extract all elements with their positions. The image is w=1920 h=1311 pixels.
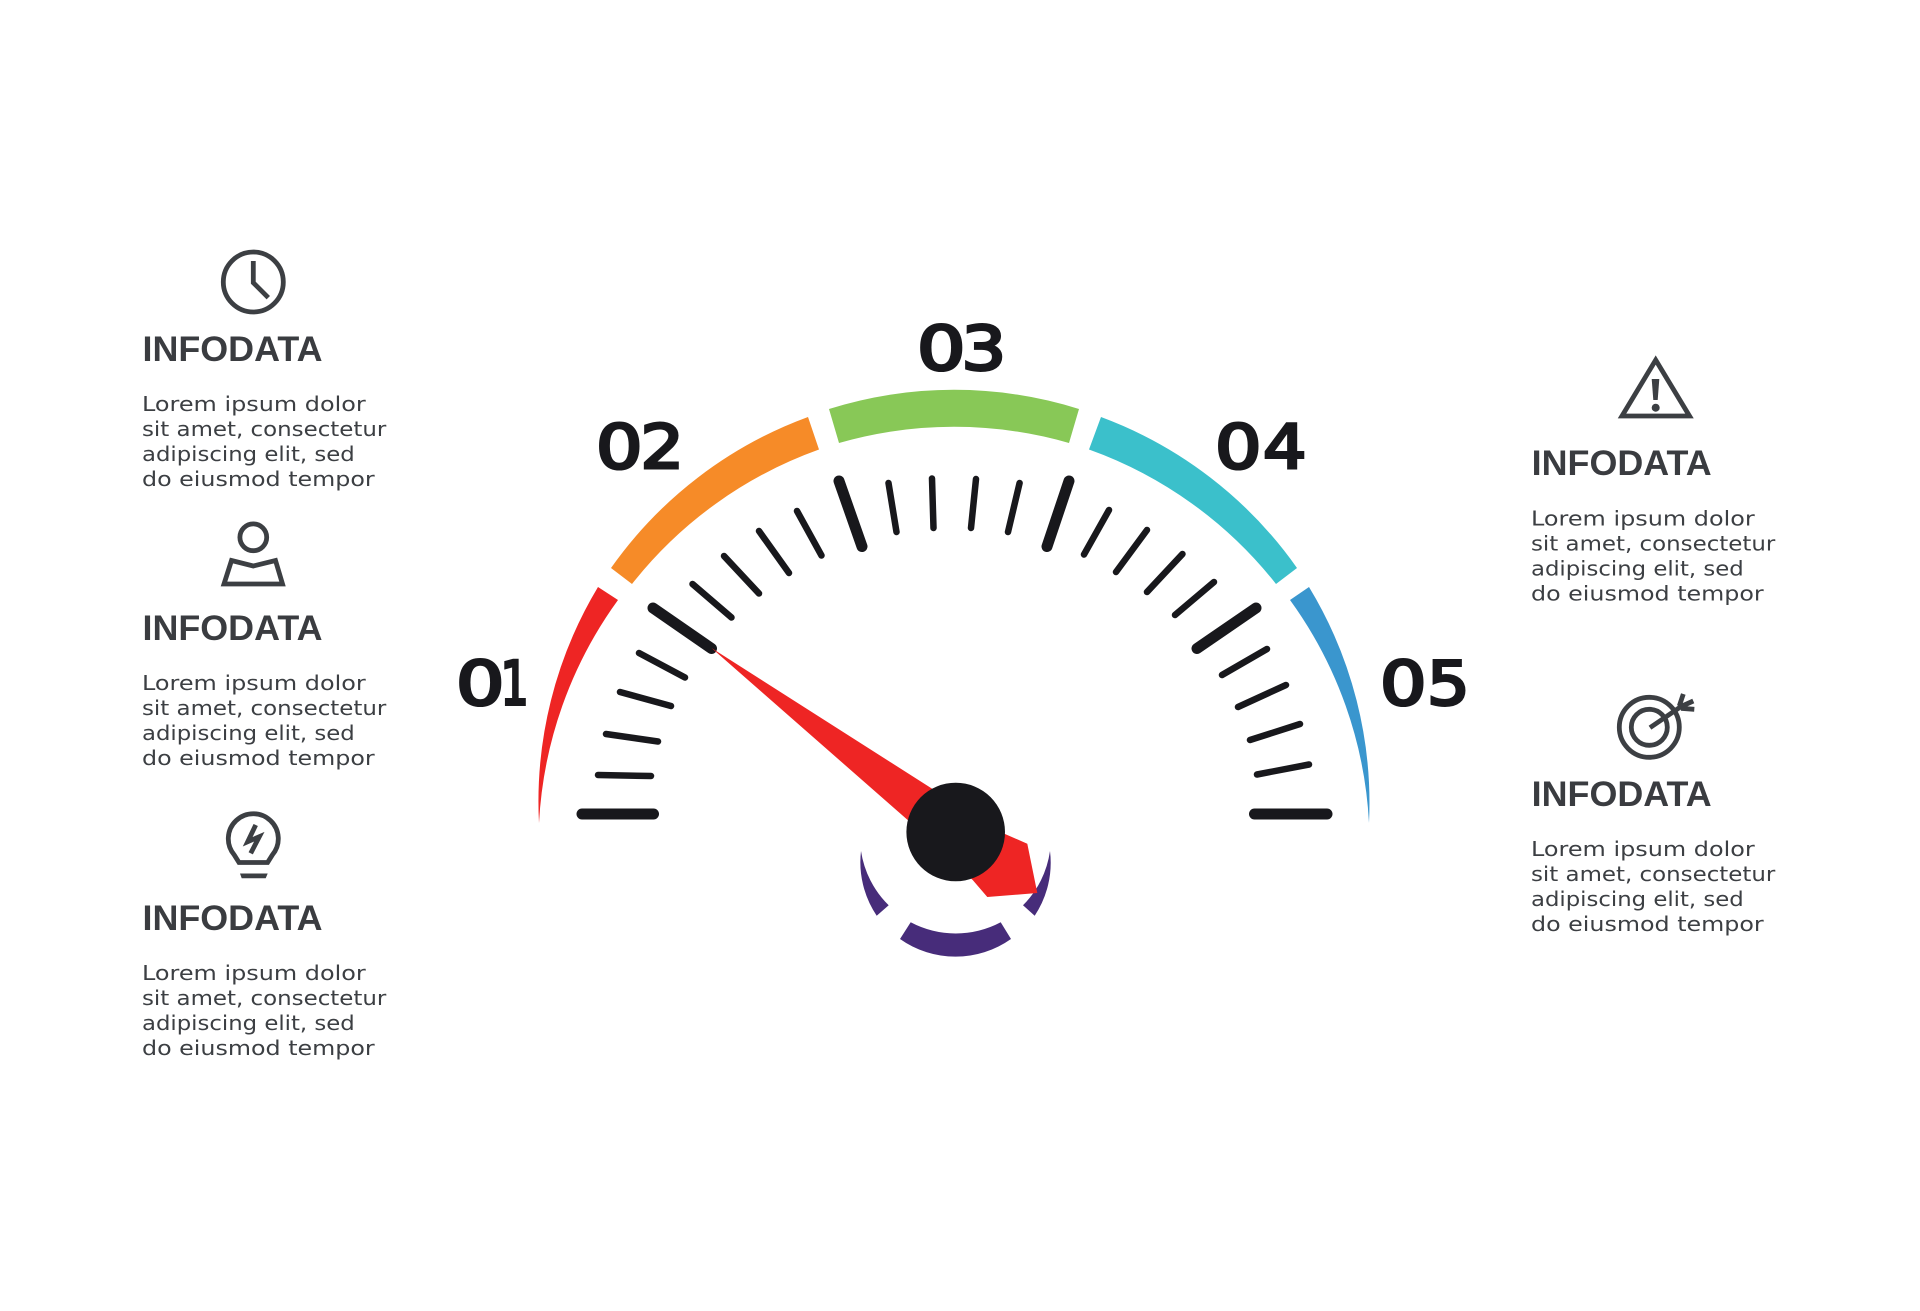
body text: Lorem ipsum dolor [142, 961, 367, 985]
arc segment 01 red [538, 587, 618, 823]
body text: sit amet, consectetur [142, 696, 387, 720]
gauge numbers [456, 313, 1470, 720]
icon: person reading [224, 524, 282, 584]
number 02 [596, 411, 684, 483]
body text [142, 392, 387, 491]
number 03: 0 [917, 314, 966, 385]
needle hub [906, 783, 1005, 881]
number 01 [456, 647, 529, 720]
body text: Lorem ipsum dolor [1531, 506, 1756, 530]
gauge needle [712, 648, 1037, 897]
number 05 [1380, 647, 1470, 720]
info block: clock [142, 252, 387, 491]
number 05: 5 [1427, 648, 1470, 720]
heading: INFODATA [142, 899, 322, 938]
body text: do eiusmod tempor [1531, 912, 1765, 936]
body text: adipiscing elit, sed [142, 1011, 355, 1035]
body text [142, 671, 387, 770]
body text: sit amet, consectetur [1531, 532, 1776, 556]
gauge arc segments [538, 390, 1369, 823]
body text: Lorem ipsum dolor [1531, 837, 1756, 861]
body text: do eiusmod tempor [142, 467, 376, 491]
arc segment 03 green [829, 390, 1079, 443]
number 03: 3 [962, 313, 1006, 384]
body text: adipiscing elit, sed [142, 721, 355, 745]
arc segment 04 teal [1089, 417, 1297, 584]
info block: light bulb [142, 814, 387, 1060]
heading: INFODATA [142, 609, 322, 648]
number 02: 0 [596, 411, 643, 482]
icon: warning triangle [1622, 360, 1690, 416]
arc segment 05 blue [1290, 587, 1369, 823]
body text [1531, 837, 1776, 936]
body text: Lorem ipsum dolor [142, 392, 367, 416]
number 01: 1 [500, 647, 529, 719]
info block: warning [1531, 360, 1776, 606]
body text: sit amet, consectetur [1531, 862, 1776, 886]
body text: do eiusmod tempor [142, 1036, 376, 1060]
body text: adipiscing elit, sed [1531, 887, 1744, 911]
needle pointer [712, 648, 1037, 897]
body text: adipiscing elit, sed [142, 442, 355, 466]
body text: sit amet, consectetur [142, 986, 387, 1010]
purple base arcs [860, 851, 1051, 957]
number 03 [917, 313, 1006, 385]
body text: adipiscing elit, sed [1531, 556, 1744, 580]
body text: do eiusmod tempor [1531, 582, 1765, 606]
icon: clock [223, 252, 283, 312]
number 05: 0 [1380, 647, 1427, 719]
number 04: 0 [1215, 411, 1262, 482]
body text: sit amet, consectetur [142, 417, 387, 441]
heading: INFODATA [1532, 775, 1712, 814]
body text: do eiusmod tempor [142, 746, 376, 770]
number 04: 4 [1263, 412, 1306, 483]
icon: target with dart [1619, 694, 1694, 757]
info block: person with book [142, 524, 387, 770]
body text [142, 961, 387, 1060]
info block: target [1531, 694, 1776, 936]
number 01: 0 [456, 649, 505, 720]
icon: light bulb [228, 814, 278, 878]
heading: INFODATA [142, 330, 322, 369]
body text: Lorem ipsum dolor [142, 671, 367, 695]
body text [1531, 506, 1776, 606]
number 02: 2 [640, 412, 684, 483]
heading: INFODATA [1532, 444, 1712, 483]
arc segment 02 orange [611, 417, 819, 584]
gauge tick marks [582, 478, 1327, 814]
number 04 [1215, 411, 1306, 483]
